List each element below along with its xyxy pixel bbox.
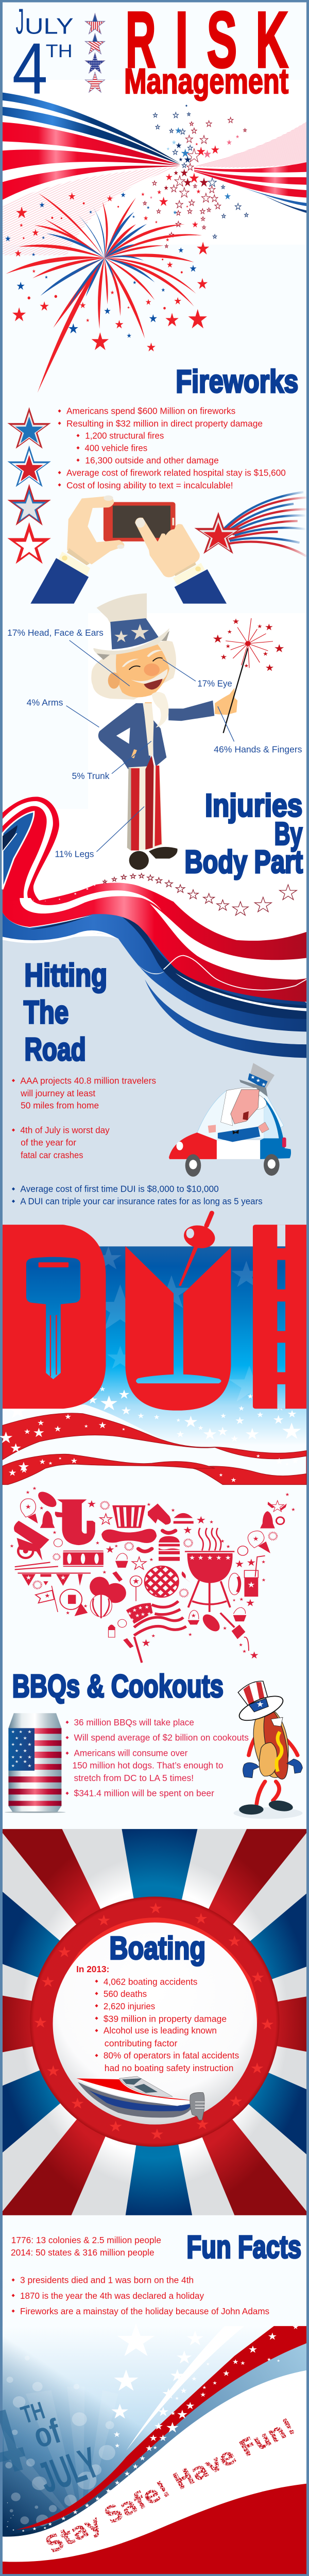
flowing stripes left [3, 92, 180, 200]
boating stats [76, 1964, 239, 2073]
boating stats: 80% of operators in fatal accidents [104, 2050, 239, 2060]
hatched fan left [3, 167, 180, 255]
decorative stars column [7, 407, 51, 564]
pie [145, 1566, 179, 1597]
fun facts bullets: Fireworks are a mainstay of the holiday because of John Adams [20, 2306, 269, 2316]
BBQ bullets lower [65, 1748, 224, 1798]
star cluster [141, 105, 248, 248]
Boating heading: Boating [109, 1930, 205, 1966]
white streak [126, 2326, 244, 2451]
4th of July lettering: TH [18, 2396, 48, 2429]
steel blue band [3, 2343, 306, 2537]
stars on banners [0, 1414, 298, 1482]
DUI cost bullets [12, 1183, 263, 1206]
Risk heading [126, 0, 288, 84]
fireworks bullets: 16,300 outside and other damage [85, 455, 219, 466]
BBQ section [10, 1486, 295, 1742]
Uncle Sam driving car [169, 1063, 291, 1177]
July 4th title: TH [46, 42, 73, 61]
BBQ bullets lower: $341.4 million will be spent on beer [74, 1788, 214, 1798]
drum [62, 1551, 105, 1567]
letter I with road stripes [253, 1225, 306, 1409]
hot dogs [139, 1531, 176, 1551]
waving red banners [3, 1413, 306, 1485]
lollipop [130, 1576, 142, 1601]
badge ring with stars [30, 1896, 280, 2147]
road bullets: 4th of July is worst day [20, 1125, 110, 1136]
footballs [35, 1489, 223, 1634]
DUI section [0, 1183, 306, 1485]
sky background [3, 2326, 306, 2543]
hitting the road section [3, 873, 306, 1185]
American flag beer can [5, 1713, 65, 1813]
4th of July lettering: of [28, 2412, 65, 2455]
body part labels: 46% Hands & Fingers [214, 744, 302, 754]
red ribbon [16, 2326, 306, 2530]
boating stats: 560 deaths [104, 1989, 147, 1999]
body part labels: 17% Head, Face & Ears [7, 628, 104, 638]
road bullets: 50 miles from home [21, 1100, 99, 1110]
closing banner section [0, 2324, 306, 2574]
fireworks bullets: Resulting in $32 million in direct property damage [66, 418, 263, 429]
population facts: 2014: 50 states & 316 million people [11, 2247, 154, 2258]
Hitting The Road heading: The [24, 994, 68, 1030]
fireworks bullets [58, 405, 286, 490]
July 4th title: 4 [12, 28, 48, 109]
small extras [54, 1500, 287, 1651]
BBQ bullets lower: Americans will consume over [74, 1748, 187, 1758]
fireworks bullets: 1,200 structural fires [85, 430, 164, 441]
burger bun [174, 1513, 194, 1523]
grey section background [3, 936, 306, 1185]
road bullets: will journey at least [20, 1088, 95, 1098]
road bullets: fatal car crashes [21, 1150, 83, 1160]
oven mitt [148, 1503, 171, 1524]
body part labels: 5% Trunk [72, 771, 110, 781]
speedboat and fun facts section [11, 2076, 301, 2316]
BBQ lower and boating section [3, 1681, 306, 2215]
sparkler [213, 618, 284, 733]
tuba [55, 1499, 95, 1545]
BBQ bullets upper: 36 million BBQs will take place [74, 1717, 194, 1727]
fireworks bullets: Average cost of firework related hospital stay is $15,600 [66, 467, 286, 478]
drink glass [244, 1556, 265, 1597]
population facts: 1776: 13 colonies & 2.5 million people [11, 2235, 161, 2245]
USA map made of icons [10, 1486, 295, 1663]
DUI cost bullets: A DUI can triple your car insurance rates for as long as 5 years [20, 1196, 263, 1206]
BBQ bullets upper: Will spend average of $2 billion on cookouts [74, 1732, 249, 1742]
fun facts bullets [12, 2275, 269, 2316]
white panel stars [8, 1386, 301, 1442]
DUI cost bullets: Average cost of first time DUI is $8,000 to $10,000 [20, 1183, 219, 1194]
header and fireworks burst [3, 0, 306, 393]
cupcakes and treats [115, 1553, 246, 1624]
bunting [18, 1572, 91, 1588]
firework burst [5, 192, 209, 393]
fun facts bullets: 3 presidents died and 1 was born on the 4th [20, 2275, 194, 2285]
small stars on ribbon [33, 884, 96, 902]
top hat [101, 1505, 157, 1543]
fireworks bullets: Cost of losing ability to text = incalculable! [66, 480, 233, 490]
boating stats: 4,062 boating accidents [104, 1976, 197, 1987]
letter U with martini glass [125, 1213, 231, 1411]
hatched fan right [194, 122, 306, 167]
white stars trail [7, 2324, 298, 2532]
population facts [11, 2235, 161, 2258]
spatula [220, 1613, 245, 1639]
BBQ bullets lower: 150 million hot dogs. That’s enough to [72, 1760, 224, 1770]
faint background stars [9, 1246, 293, 1402]
outline stars [100, 1514, 146, 1569]
sunburst rays [3, 1829, 306, 2215]
white sweeping wave [3, 2370, 306, 2562]
BBQ bullets lower: stretch from DC to LA 5 times! [74, 1773, 194, 1783]
4th of July lettering: JULY [31, 2438, 106, 2502]
4th of July lettering [0, 2389, 106, 2502]
body part labels [7, 628, 302, 859]
shooting star [194, 492, 306, 556]
hot dog mascot [233, 1681, 302, 1819]
boating stats: 2,620 injuries [104, 2001, 155, 2011]
fireworks bullets: 400 vehicle fires [85, 443, 147, 453]
body part labels: 11% Legs [55, 849, 94, 859]
soft white drift [3, 1404, 177, 1445]
bokeh lights [5, 2355, 115, 2526]
Hitting The Road heading: Road [24, 1031, 86, 1067]
flag stars column [85, 14, 105, 92]
bells [40, 1511, 284, 1528]
grey background band [3, 1185, 306, 1246]
red base wave [3, 2484, 306, 2574]
leader lines [66, 640, 234, 852]
speedboat [76, 2076, 204, 2120]
road bullets [12, 1075, 156, 1160]
flowing stripes right [194, 162, 306, 213]
boating stats: Alcohol use is leading known [104, 2025, 217, 2036]
body part labels: 4% Arms [27, 697, 63, 707]
fireworks bullets: Americans spend $600 Million on fireworks [66, 405, 235, 416]
boating stats: contributing factor [105, 2038, 177, 2048]
fun facts bullets: 1870 is the year the 4th was declared a holiday [20, 2291, 204, 2301]
road bullets: AAA projects 40.8 million travelers [20, 1075, 156, 1086]
July 4th title: J [16, 2, 24, 42]
ice cream cones [21, 1499, 270, 1553]
balloons [90, 1577, 126, 1618]
boating stats: In 2013: [76, 1964, 109, 1974]
arc of outlined stars [103, 873, 297, 916]
July 4th title: ULY [25, 13, 74, 39]
BBQ bullets upper [65, 1717, 249, 1742]
body part labels: 17% Eye [197, 678, 232, 688]
grill with steam [185, 1528, 234, 1612]
July 4th title [12, 2, 74, 109]
waving flag [126, 1601, 186, 1663]
small flag and horn [36, 1586, 88, 1616]
boating stats: $39 million in property damage [104, 2013, 227, 2024]
BBQs and Cookouts heading: BBQs & Cookouts [12, 1668, 224, 1704]
Hitting The Road heading: Hitting [24, 957, 107, 993]
Uncle Sam figure [91, 594, 237, 870]
injuries by body part section [3, 594, 303, 914]
blue gradient panel [3, 1246, 306, 1445]
Hitting The Road heading [24, 957, 107, 1067]
fireworks section [7, 363, 306, 604]
map stars [10, 1486, 295, 1658]
road bullets: of the year for [21, 1137, 76, 1147]
swirl ribbon left [3, 796, 59, 914]
patriotic wave ribbons [3, 883, 306, 1058]
hands holding phone [30, 495, 227, 604]
burger [159, 1536, 180, 1561]
letter D with car key [3, 1225, 106, 1409]
boating stats: had no boating safety instruction [105, 2063, 233, 2073]
drumsticks [15, 1562, 58, 1569]
cannon [14, 1521, 60, 1561]
Injuries By Body Part heading [185, 787, 303, 879]
